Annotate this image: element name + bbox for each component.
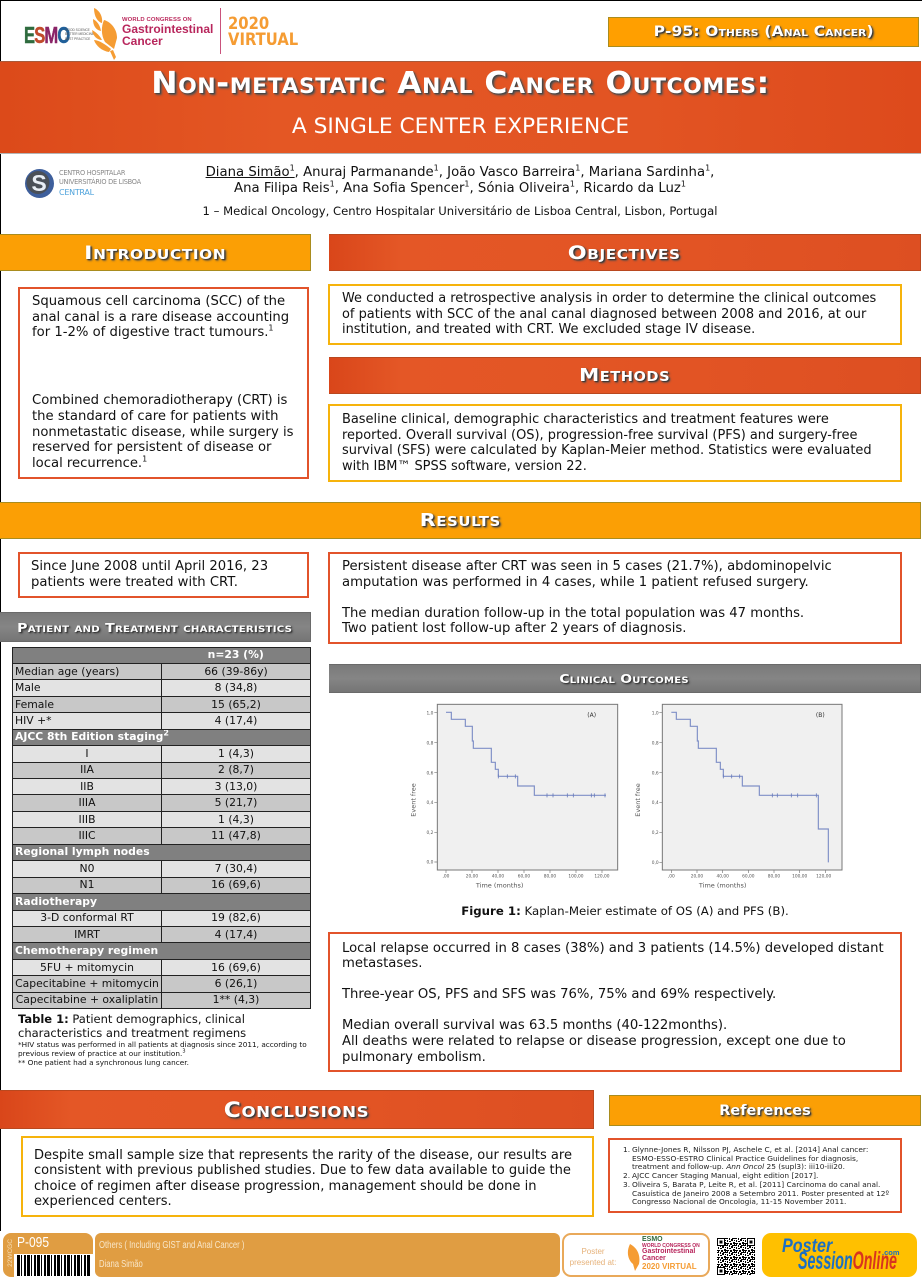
- chart A: overall survival: 20,00: [466, 873, 478, 879]
- logo divider: [220, 8, 221, 54]
- table: patient characteristics: 19 (82,6): [211, 911, 261, 924]
- panel: conclusions text: Despite small sample size that represents the rarity of the disease, our results are consistent with previous published studies. Due to few data available to guide the choice of regimen after disease progression, management should be done in experienced centers.: [34, 1148, 572, 1209]
- heading: Clinical Outcomes: Clinical Outcomes: [560, 671, 689, 686]
- icon: small leaf: [628, 1244, 640, 1271]
- heading: Conclusions: [0, 1090, 594, 1129]
- chart B: progression-free survival: Event free: [634, 783, 642, 817]
- logo: Centro Hospitalar: [25, 169, 141, 198]
- poster number tag: [608, 17, 919, 47]
- heading: References: [609, 1095, 921, 1126]
- heading: References: References: [719, 1102, 811, 1118]
- badge logo text: 2020 VIRTUAL: [642, 1262, 697, 1271]
- panel: introduction text: [18, 287, 309, 479]
- panel: references list: 1.: [623, 1145, 630, 1154]
- chart A: overall survival: 1,0: [426, 710, 434, 716]
- footer: poster id block: [3, 1233, 93, 1277]
- table footnotes: *HIV status was performed in all patients at diagnosis since 2011, according to previous review of practice at our institution.3: [18, 1040, 307, 1058]
- icon: wheat leaf: [92, 8, 117, 60]
- panel: references list: 3.: [623, 1180, 630, 1189]
- chart: Kaplan-Meier curves: [410, 704, 842, 890]
- badge logo text: WORLD CONGRESS ON: [642, 1243, 700, 1249]
- table: patient characteristics: 1** (4,3): [213, 993, 259, 1006]
- table: patient characteristics: 5 (21,7): [215, 796, 257, 809]
- title banner: [0, 61, 921, 154]
- chart A: overall survival: 0,4: [426, 800, 434, 806]
- badge logo text: Cancer: [642, 1255, 666, 1262]
- panel: references list: Congresso Nacional de Oncologia, 11-15 November 2011.: [632, 1197, 846, 1206]
- badge logo text: Gastrointestinal: [642, 1248, 695, 1255]
- chart A: overall survival: Time (months): [475, 882, 523, 890]
- table: patient characteristics: N0: [80, 862, 94, 875]
- table: patient characteristics: IIA: [80, 763, 94, 776]
- table: patient characteristics: N1: [80, 878, 94, 891]
- table: patient characteristics: HIV +*: [15, 714, 52, 727]
- panel: methods text: Baseline clinical, demographic characteristics and treatment features were reported. Overall survival (OS), progression-free survival (PFS) and surgery-free survival (SFS) were calculated by Kaplan-Meier method. Statistics were evaluated with IBM™ SPSS software, version 22.: [342, 412, 872, 474]
- badge logo text: [642, 1236, 700, 1271]
- panel: relapse and survival results: All deaths were related to relapse or disease progression, except one due to pulmonary embolism.: [342, 1034, 846, 1065]
- panel: relapse and survival results: [328, 932, 902, 1072]
- table: patient characteristics: I: [85, 747, 89, 760]
- panel: relapse and survival results: Median overall survival was 63.5 months (40-122months).: [342, 1018, 727, 1033]
- logo text: Gastrointestinal Cancer: [122, 22, 213, 48]
- heading: Conclusions: Conclusions: [224, 1098, 369, 1122]
- table: patient characteristics: IIB: [80, 780, 94, 793]
- chart A: overall survival: 120,00: [594, 873, 610, 879]
- table footnotes: ** One patient had a synchronous lung cancer.: [18, 1058, 189, 1067]
- chart B: progression-free survival: 100,00: [792, 873, 807, 879]
- panel: patients treated: Since June 2008 until April 2016, 23 patients were treated with CRT.: [31, 559, 268, 590]
- logo text: 2020 Virtual: VIRTUAL: [228, 30, 298, 50]
- chart B: progression-free survival: Time (months): [698, 882, 746, 890]
- table: patient characteristics: 16 (69,6): [211, 878, 261, 891]
- heading: Objectives: [329, 234, 921, 271]
- table: patient characteristics: Female: [15, 698, 54, 711]
- panel: relapse and survival results: Three-year OS, PFS and SFS was 76%, 75% and 69% respectively.: [342, 987, 776, 1002]
- table: patient characteristics: 3 (13,0): [215, 780, 257, 793]
- chart A: overall survival: (A): [587, 712, 596, 719]
- heading: Results: [0, 502, 921, 539]
- panel: references list: AJCC Cancer Staging Manual, eight edition [2017].: [632, 1171, 818, 1180]
- logo text: hospital name: [59, 169, 141, 197]
- table: patient characteristics: 4 (17,4): [215, 928, 257, 941]
- table: patient characteristics: 15 (65,2): [211, 698, 261, 711]
- logo text: .com: .com: [882, 1248, 900, 1257]
- panel: persistent disease: The median duration follow-up in the total population was 47 months.: [342, 606, 804, 621]
- panel: persistent disease: Persistent disease after CRT was seen in 5 cases (21.7%), abdominopelvic amputation was performed in 4 cases, while 1 patient refused surgery.: [342, 559, 832, 590]
- table: patient characteristics: Radiotherapy: [15, 895, 97, 908]
- heading: Methods: [329, 357, 921, 394]
- table: patient characteristics: Chemotherapy regimen: [15, 944, 158, 957]
- panel: objectives text: We conducted a retrospective analysis in order to determine the clinical outcomes of patients with SCC of the anal canal diagnosed between 2008 and 2016, at our institution, and treated with CRT. We excluded stage IV disease.: [342, 291, 876, 337]
- panel: persistent disease: Two patient lost follow-up after 2 years of diagnosis.: [342, 621, 686, 636]
- authors: [206, 163, 714, 196]
- badge logo text: ESMO: [642, 1236, 663, 1243]
- chart B: progression-free survival: 1,0: [652, 710, 659, 716]
- chart B: progression-free survival: 0,6: [652, 770, 659, 776]
- table: patient characteristics: Capecitabine + oxaliplatin: [16, 993, 158, 1006]
- panel: relapse and survival results: Local relapse occurred in 8 cases (38%) and 3 patients (14.5%) developed distant metastases.: [342, 940, 884, 971]
- chart A: overall survival: 100,00: [568, 873, 584, 879]
- footer: QR code: [717, 1238, 755, 1275]
- logo text: hospital name: UNIVERSITÁRIO DE LISBOA: [59, 178, 141, 186]
- table: patient characteristics: IIIC: [78, 829, 96, 842]
- panel: references list: [608, 1138, 902, 1213]
- table: patient characteristics: 1 (4,3): [218, 747, 254, 760]
- logo tagline: BETTER MEDICINE: [65, 32, 94, 36]
- footer topic: Others ( Including GIST and Anal Cancer ): [99, 1240, 244, 1251]
- panel: references list: Oliveira S, Barata P, Leite R, et al. [2011] Carcinoma do canal anal.: [632, 1180, 880, 1189]
- authors: Ana Filipa Reis1, Ana Sofia Spencer1, Sónia Oliveira1, Ricardo da Luz1: [234, 180, 686, 196]
- logo tagline: [65, 28, 94, 41]
- figure caption: Figure 1: Kaplan-Meier estimate of OS (A) and PFS (B).: [461, 904, 789, 918]
- heading: Patient and Treatment characteristics: Patient and Treatment characteristics: [18, 620, 292, 634]
- table: patient characteristics: AJCC 8th Edition staging2: [15, 729, 169, 743]
- chart A: overall survival: 80,00: [544, 873, 556, 879]
- table footnotes: [18, 1040, 307, 1067]
- badge label: Poster presented at:: [570, 1247, 616, 1266]
- chart A: overall survival: 0,6: [426, 770, 434, 776]
- title: Non-metastatic Anal Cancer Outcomes:: [151, 66, 770, 101]
- table: patient characteristics: 66 (39-86y): [204, 665, 268, 678]
- logo text: ESMO: ESMO: [24, 22, 69, 48]
- panel: references list: treatment and follow-up. Ann Oncol 25 (supl3): iii10-iii20.: [632, 1162, 845, 1171]
- chart A: overall survival: 0,2: [426, 830, 434, 836]
- table: patient characteristics: 16 (69,6): [211, 961, 261, 974]
- heading: Methods: Methods: [579, 365, 670, 386]
- logo text: 2020 Virtual: [228, 14, 298, 50]
- chart A: overall survival: 60,00: [518, 873, 530, 879]
- chart B: progression-free survival: 0,8: [652, 741, 659, 747]
- poster number: P-095: [17, 1234, 49, 1251]
- text: CRT standard of care: Combined chemoradiotherapy (CRT) is the standard of care for patients with nonmetastatic disease, while surgery is reserved for persistent of disease or local recurrence.1: [32, 393, 294, 471]
- table: patient characteristics: 4 (17,4): [215, 714, 257, 727]
- table: patient characteristics: 11 (47,8): [211, 829, 261, 842]
- panel: references list: ESMO-ESSO-ESTRO Clinical Practice Guidelines for diagnosis,: [632, 1154, 858, 1163]
- table: patient characteristics: 3-D conformal RT: [40, 911, 134, 924]
- table: patient characteristics: [12, 647, 311, 1009]
- footer code: 22WCGC: [7, 1239, 14, 1267]
- logo: ESMO and World Congress on Gastrointestinal Cancer 2020 Virtual: [24, 8, 298, 60]
- chart B: progression-free survival: 20,00: [691, 873, 703, 879]
- chart B: progression-free survival: 40,00: [716, 873, 729, 879]
- footer author: Diana Simão: [99, 1259, 143, 1270]
- chart A: overall survival: Event free: [410, 783, 418, 817]
- table: patient characteristics: IIIB: [79, 813, 95, 826]
- footer: topic and author bar: [95, 1233, 560, 1277]
- chart B: progression-free survival: ,00: [668, 873, 675, 879]
- table: patient characteristics: Regional lymph nodes: [15, 845, 150, 858]
- icon: hospital emblem: [25, 169, 54, 198]
- logo tagline: GOOD SCIENCE: [65, 28, 90, 32]
- chart B: progression-free survival: 0,2: [652, 830, 659, 836]
- panel: references list: Glynne-Jones R, Nilsson PJ, Aschele C, et al. [2014] Anal cancer:: [632, 1145, 868, 1154]
- table: patient characteristics: 8 (34,8): [215, 681, 257, 694]
- icon: hospital emblem: S: [31, 170, 47, 196]
- table: patient characteristics: 2 (8,7): [218, 763, 254, 776]
- panel: patients treated: [18, 552, 309, 598]
- heading: Clinical Outcomes: [329, 664, 921, 693]
- table: patient characteristics: 7 (30,4): [215, 862, 257, 875]
- table caption: Table 1: Patient demographics, clinical characteristics and treatment regimens: [18, 1012, 246, 1040]
- logo text: SessionOnline: SessionOnline: [798, 1247, 897, 1275]
- heading: Introduction: [0, 234, 311, 271]
- heading: Objectives: Objectives: [568, 242, 681, 264]
- subtitle: A SINGLE CENTER EXPERIENCE: [292, 114, 629, 139]
- table: patient characteristics: Capecitabine + mitomycin: [15, 977, 159, 990]
- chart B: progression-free survival: 120,00: [816, 873, 831, 879]
- logo text: 2020 Virtual: 2020: [228, 14, 269, 34]
- heading: Patient and Treatment characteristics: [0, 612, 311, 642]
- logo text: Gastrointestinal Cancer: Cancer: [122, 34, 163, 48]
- table: patient characteristics: 5FU + mitomycin: [40, 961, 134, 974]
- table: patient characteristics: 1 (4,3): [218, 813, 254, 826]
- chart B: progression-free survival: (B): [816, 712, 825, 719]
- logo text: hospital name: CENTRO HOSPITALAR: [59, 169, 125, 177]
- chart A: overall survival: [410, 704, 618, 890]
- chart B: progression-free survival: 60,00: [742, 873, 755, 879]
- panel: references list: 2.: [623, 1171, 630, 1180]
- footer: presented at badge: [562, 1233, 710, 1277]
- heading: Introduction: Introduction: [84, 242, 226, 264]
- footer: PosterSessionOnline logo: [762, 1233, 917, 1277]
- poster number tag: P-95: Others (Anal Cancer): [653, 24, 873, 40]
- table: patient characteristics: n=23 (%): [208, 648, 264, 661]
- chart B: progression-free survival: 0,4: [652, 800, 659, 806]
- panel: references list: Casuística de Janeiro 2008 a Setembro 2011. Poster presented at 12º: [632, 1189, 889, 1198]
- chart B: progression-free survival: [634, 704, 842, 890]
- chart B: progression-free survival: 80,00: [768, 873, 780, 879]
- logo text: World Congress on: WORLD CONGRESS ON: [122, 17, 192, 23]
- heading: Results: Results: [419, 510, 501, 531]
- logo tagline: BEST PRACTICE: [65, 37, 90, 41]
- authors: Diana Simão1, Anuraj Parmanande1, João Vasco Barreira1, Mariana Sardinha1,: [206, 163, 714, 180]
- chart B: progression-free survival: 0,0: [652, 860, 659, 866]
- logo text: Gastrointestinal Cancer: Gastrointestinal: [122, 22, 213, 36]
- table: patient characteristics: IIIA: [79, 796, 95, 809]
- table: patient characteristics: Median age (years): [15, 665, 119, 678]
- logo text: hospital name: CENTRAL: [59, 188, 94, 197]
- table: patient characteristics: IMRT: [74, 928, 100, 941]
- chart A: overall survival: 40,00: [492, 873, 504, 879]
- chart A: overall survival: 0,0: [426, 860, 434, 866]
- logo text: Poster: Poster: [782, 1236, 832, 1257]
- barcode: [14, 1254, 93, 1277]
- table: patient characteristics: 6 (26,1): [215, 977, 257, 990]
- panel: persistent disease: [328, 552, 902, 644]
- chart A: overall survival: 0,8: [426, 741, 434, 747]
- text: SCC definition: Squamous cell carcinoma (SCC) of the anal canal is a rare disease accounting for 1-2% of digestive tract tumours.1: [32, 294, 289, 340]
- table: patient characteristics: Male: [15, 681, 41, 694]
- chart A: overall survival: ,00: [443, 873, 450, 879]
- affiliation: 1 – Medical Oncology, Centro Hospitalar Universitário de Lisboa Central, Lisbon, Portugal: [203, 204, 717, 218]
